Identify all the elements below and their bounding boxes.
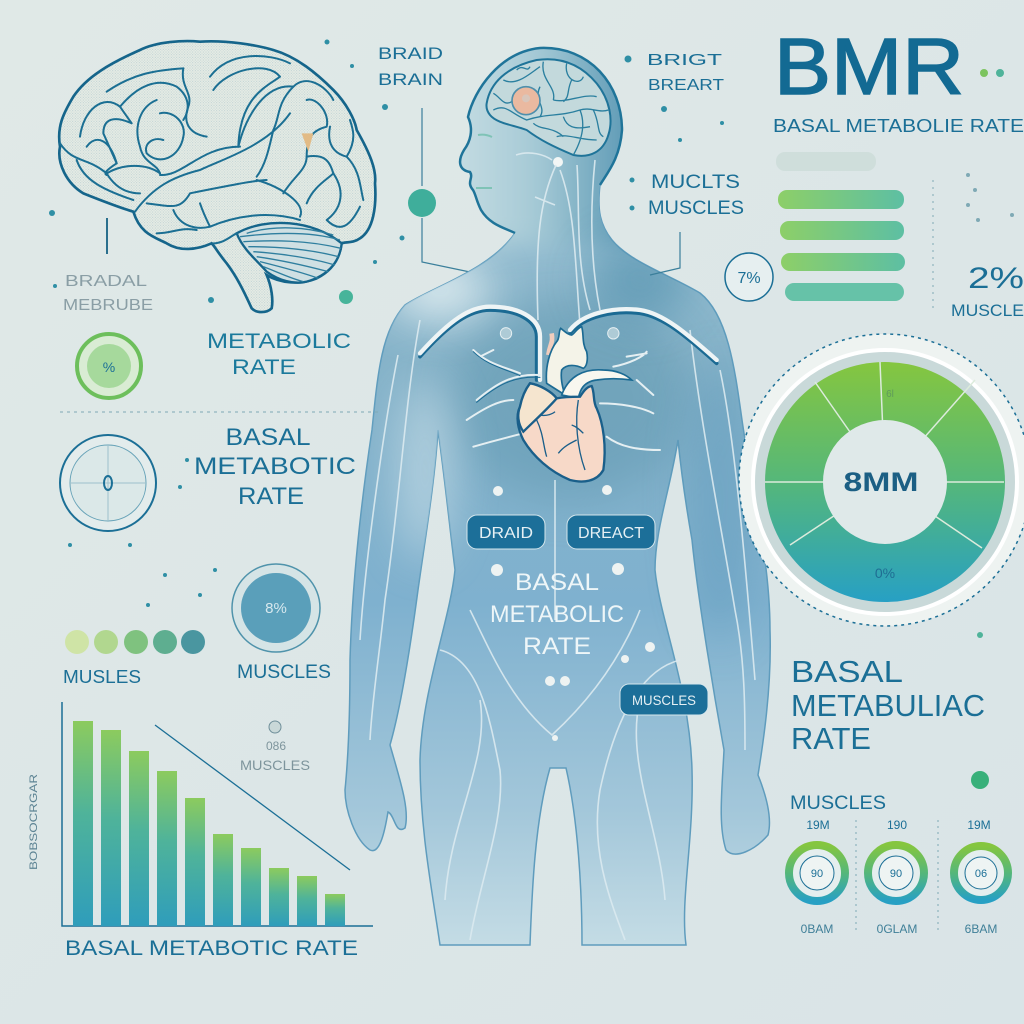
label: brain bbox=[378, 44, 443, 89]
gauge 3: 06 bbox=[975, 868, 987, 880]
body text: BASAL bbox=[515, 569, 599, 596]
circles row bbox=[65, 630, 205, 654]
label: basal metabolic rate: BASAL bbox=[226, 424, 310, 451]
label: muscles: MUSCLES bbox=[648, 198, 744, 219]
tag: braid bbox=[467, 515, 545, 549]
gauge 3: 6BAM bbox=[965, 922, 997, 936]
text block right: METABULIAC bbox=[791, 688, 985, 723]
icon: circle percent: 8% bbox=[265, 600, 287, 617]
pills bar list bbox=[776, 152, 905, 301]
text block right: BASAL bbox=[791, 654, 903, 689]
connector: brain marker bbox=[408, 108, 470, 272]
icon: circle percent bbox=[232, 564, 320, 652]
head outline bbox=[460, 48, 622, 233]
label: muscles: MUSCLES bbox=[237, 662, 331, 683]
human figure bbox=[345, 30, 770, 945]
face marks bbox=[476, 135, 492, 188]
icon: small dots right of title bbox=[980, 69, 1004, 77]
body text: RATE bbox=[523, 633, 591, 660]
gauge 3 bbox=[954, 818, 1008, 936]
heart body bbox=[518, 383, 605, 482]
small joint dots bbox=[491, 485, 655, 741]
tag: breact bbox=[567, 515, 655, 549]
tag: braid: DRAID bbox=[479, 525, 533, 542]
brain spot bbox=[512, 87, 540, 115]
badge: percent bbox=[725, 253, 773, 301]
green dot bbox=[971, 771, 989, 789]
donut chart: 6l bbox=[886, 389, 894, 400]
text block right: RATE bbox=[791, 721, 871, 756]
gauge 1 bbox=[789, 818, 845, 936]
tag: muscles: MUSCLES bbox=[632, 692, 696, 708]
aorta bbox=[546, 327, 587, 395]
gyri bbox=[60, 56, 363, 243]
label: brain: BRAIN bbox=[378, 70, 443, 89]
label: muscles bbox=[648, 172, 744, 219]
vessel nodes bbox=[500, 328, 512, 339]
heart and vessels bbox=[420, 307, 717, 482]
left labels bbox=[63, 273, 153, 314]
left labels: MEBRUBE bbox=[63, 297, 153, 314]
label: breast heart: BREART bbox=[648, 77, 724, 94]
gauge 2: 190 bbox=[887, 818, 907, 832]
label: metabolic rate bbox=[207, 330, 351, 379]
chart note: 086 bbox=[266, 739, 286, 753]
label: metabolic rate: RATE bbox=[232, 356, 296, 379]
chart title: BASAL METABOTIC RATE bbox=[65, 937, 358, 960]
stat: muscles percent bbox=[951, 262, 1024, 320]
badge: percent: 7% bbox=[737, 270, 761, 287]
label: breast heart bbox=[647, 52, 724, 94]
stat: muscles percent: MUSCLE bbox=[951, 301, 1024, 320]
gauge 2 bbox=[868, 818, 924, 936]
badge: green ring bbox=[77, 334, 141, 398]
chart note: MUSCLES bbox=[240, 757, 310, 773]
gauge 1: 90 bbox=[811, 868, 823, 880]
donut chart: 8MM bbox=[844, 467, 918, 497]
icon: dial bbox=[60, 435, 156, 531]
text block right bbox=[791, 654, 985, 756]
chart note bbox=[240, 721, 310, 773]
tag: muscles bbox=[620, 684, 708, 715]
gauge 1: 0BAM bbox=[801, 922, 833, 936]
label: breast heart: BRIGT bbox=[647, 52, 722, 69]
body text: METABOLIC bbox=[490, 601, 624, 628]
subtitle: BASAL METABOLIE RATE bbox=[773, 116, 1024, 136]
label: brain: BRAID bbox=[378, 44, 443, 63]
nerves bbox=[360, 153, 755, 940]
bar chart bbox=[28, 702, 373, 926]
gauge 3: 19M bbox=[967, 818, 991, 832]
label: basal metabolic rate: METABOTIC bbox=[194, 453, 356, 480]
badge: green ring: % bbox=[103, 359, 115, 375]
label: basal metabolic rate: RATE bbox=[238, 483, 304, 510]
label: metabolic rate: METABOLIC bbox=[207, 330, 351, 353]
cerebellum bbox=[237, 223, 342, 283]
icon: brain bbox=[59, 41, 375, 312]
title: BMR: BMR bbox=[774, 22, 964, 111]
label: muscles: MUCLTS bbox=[651, 172, 740, 193]
brain spot bbox=[302, 133, 313, 152]
connector bbox=[650, 232, 680, 275]
gauge 2: 0GLAM bbox=[877, 922, 917, 936]
donut chart: 0% bbox=[875, 565, 895, 581]
icon: green dot near brain bbox=[339, 290, 353, 304]
neck node bbox=[553, 157, 563, 167]
shading bbox=[450, 300, 690, 500]
donut chart bbox=[739, 334, 1024, 626]
stat: muscles percent: 2% bbox=[968, 262, 1024, 295]
label: basal metabolic rate bbox=[194, 424, 356, 510]
label: musles: MUSLES bbox=[63, 667, 141, 687]
connector dots bbox=[49, 40, 983, 638]
bar chart: BOBSOCRGAR bbox=[28, 774, 40, 870]
body text bbox=[490, 569, 624, 660]
gauge 2: 90 bbox=[890, 868, 902, 880]
tag: breact: DREACT bbox=[578, 525, 644, 542]
left labels: BRADAL bbox=[65, 273, 147, 290]
icon: brain in head bbox=[486, 59, 611, 156]
label: muscles right: MUSCLES bbox=[790, 793, 886, 814]
gauge 1: 19M bbox=[806, 818, 830, 832]
